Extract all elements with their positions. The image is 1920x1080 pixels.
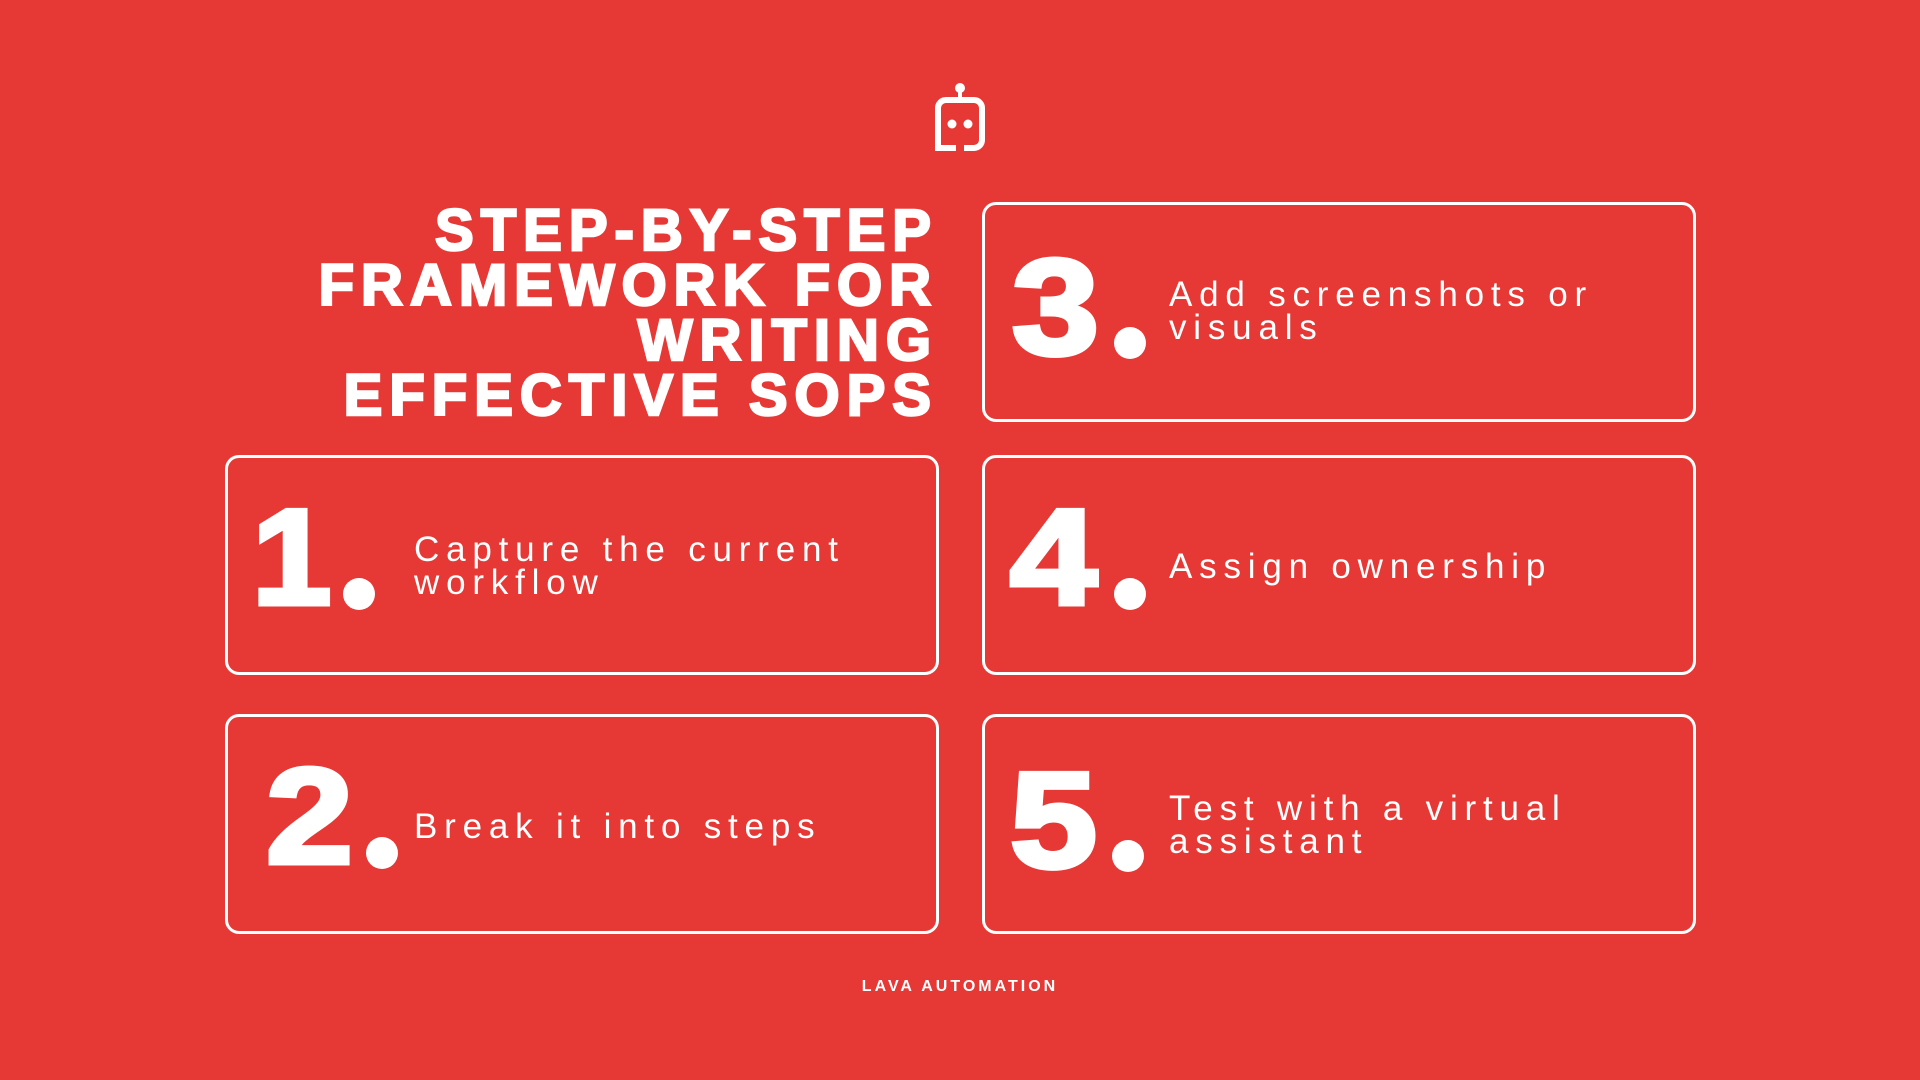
title [319, 198, 938, 428]
panel: step 4 [982, 455, 1696, 675]
dot 2 [366, 837, 398, 869]
panel: step 2 [225, 714, 939, 934]
number 4: 4 [1010, 481, 1097, 633]
text 2: Break it into steps [414, 807, 821, 846]
title: FRAMEWORK FOR [319, 253, 938, 318]
number 3: 3 [1012, 231, 1099, 383]
dot 4 [1114, 578, 1146, 610]
icon: robot [935, 83, 985, 151]
number 2: 2 [266, 740, 353, 892]
text 3 [1169, 275, 1593, 347]
number 1: 1 [252, 481, 331, 633]
footer: LAVA AUTOMATION [862, 978, 1058, 995]
text 1 [414, 530, 845, 602]
text 3: Add screenshots or [1169, 275, 1593, 314]
dot 1 [343, 578, 375, 610]
text 3: visuals [1169, 308, 1324, 347]
dot 5 [1112, 840, 1144, 872]
text 1: workflow [414, 563, 605, 602]
panel: step 1 [225, 455, 939, 675]
title: EFFECTIVE SOPS [344, 363, 938, 428]
text 1: Capture the current [414, 530, 845, 569]
title: WRITING [638, 308, 938, 373]
panel: step 5 [982, 714, 1696, 934]
text 4: Assign ownership [1169, 547, 1552, 586]
text 5: Test with a virtual [1169, 789, 1567, 828]
title: STEP-BY-STEP [435, 198, 938, 263]
dot 3 [1114, 327, 1146, 359]
panel: step 3 [982, 202, 1696, 422]
text 5 [1169, 789, 1567, 861]
number 5: 5 [1010, 744, 1097, 896]
text 5: assistant [1169, 822, 1368, 861]
